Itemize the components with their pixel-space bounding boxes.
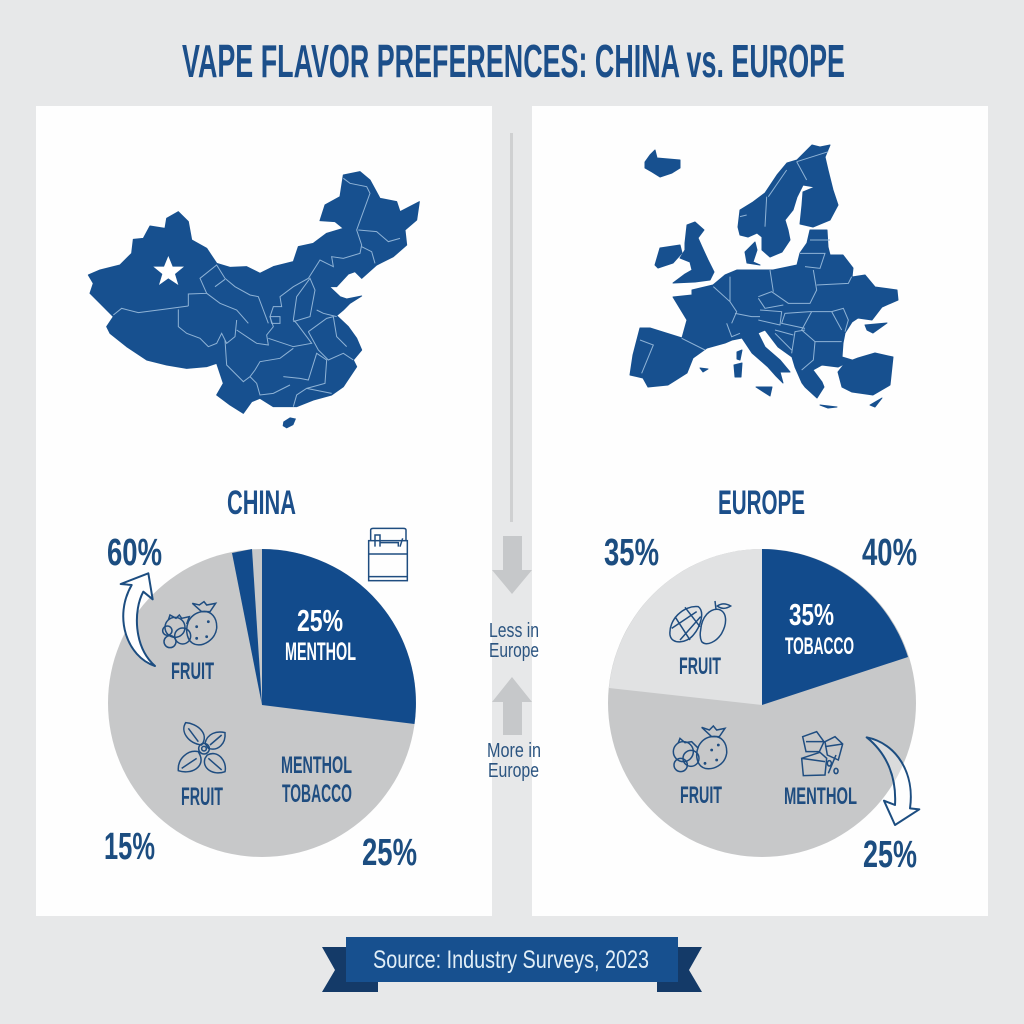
arrow: curved down bbox=[867, 737, 919, 825]
pie chart: China bbox=[108, 549, 416, 857]
pie labels: China: FRUIT bbox=[171, 658, 214, 685]
pie chart: Europe bbox=[608, 549, 916, 857]
icon: berries and fruit bbox=[673, 726, 727, 772]
label: More in Europe: Europe bbox=[488, 760, 539, 782]
pie labels: Europe: MENTHOL bbox=[784, 783, 857, 810]
pie labels: China: MENTHOL bbox=[285, 638, 356, 666]
percent: 15%: 15% bbox=[104, 826, 155, 868]
panel: Europe bbox=[532, 106, 988, 916]
panel: China bbox=[36, 106, 492, 916]
icon: star bbox=[153, 256, 184, 285]
pie labels: China: MENTHOL bbox=[281, 752, 352, 779]
percent: 35%: 35% bbox=[604, 532, 659, 574]
pie labels: China: 25% bbox=[297, 603, 343, 638]
pie labels: Europe: 35% bbox=[789, 597, 834, 632]
icon: mint leaves bbox=[178, 723, 225, 773]
label: Less in Europe bbox=[489, 620, 539, 662]
percent: 40%: 40% bbox=[862, 532, 917, 574]
label: Less in Europe: Less in bbox=[489, 620, 539, 642]
label: More in Europe: More in bbox=[487, 740, 541, 762]
pie labels: Europe: FRUIT bbox=[680, 782, 722, 809]
icon: berries and strawberry bbox=[163, 602, 217, 648]
icon: ice cubes bbox=[802, 732, 843, 776]
label: Less in Europe: Europe bbox=[489, 640, 539, 662]
percent: 25%: 25% bbox=[863, 834, 917, 876]
arrow: curved up bbox=[121, 573, 155, 666]
icon: cigarette pack bbox=[369, 528, 407, 581]
divider: centre line bbox=[510, 133, 513, 522]
arrow: down bbox=[492, 536, 532, 594]
map: China bbox=[88, 172, 419, 428]
arrow: up bbox=[492, 677, 532, 735]
percent: 60%: 60% bbox=[107, 532, 162, 574]
pie labels: Europe: TOBACCO bbox=[785, 633, 854, 660]
ribbon: source bbox=[322, 937, 702, 992]
pie labels: China: TOBACCO bbox=[282, 780, 352, 808]
heading: China: CHINA bbox=[227, 484, 296, 522]
icon: mango bbox=[670, 601, 731, 644]
label: More in Europe bbox=[487, 740, 541, 782]
percent: 25%: 25% bbox=[362, 832, 417, 874]
pie labels: China: FRUIT bbox=[181, 783, 223, 811]
pie labels: China bbox=[171, 603, 356, 811]
pie labels: Europe: FRUIT bbox=[679, 653, 721, 680]
pie labels: Europe bbox=[679, 597, 857, 810]
source text: Source: Industry Surveys, 2023 bbox=[373, 946, 649, 974]
heading: Europe: EUROPE bbox=[718, 484, 805, 522]
map: Europe bbox=[630, 145, 898, 408]
